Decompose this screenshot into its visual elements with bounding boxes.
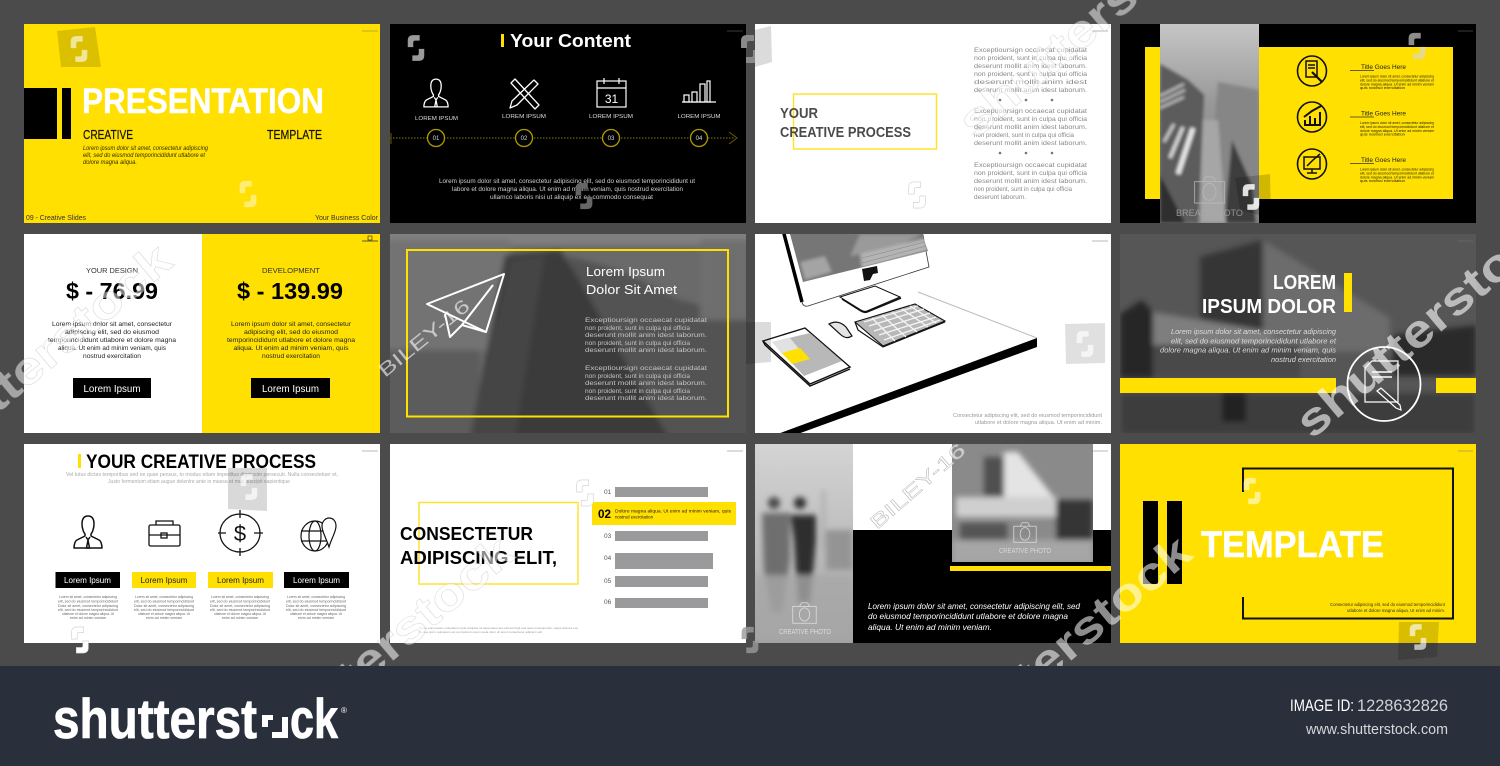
column texts: utlabore et dolore magna aliqua. Ut: [138, 611, 191, 616]
right text column: deserunt mollit anim idest laborum.: [974, 141, 1087, 147]
body text: deserunt mollit anim idest laborum.: [585, 396, 707, 402]
column buttons: [56, 572, 349, 588]
slide 2: your content timeline: [390, 24, 759, 223]
subtitle: [66, 472, 338, 485]
fine print: Nemo enim ipsam voluptatem quia voluptas sit aspernatur aut odit aut fugit sed quia consequuntur magni dolores eos: [419, 626, 578, 630]
item 2: dolore magna aliqua. Ut enim ad minim veniam: [1360, 129, 1434, 133]
body text: do eiusmod temporincididunt utlabore et dolore magna: [868, 611, 1068, 621]
watermark logo: [240, 181, 256, 207]
slide 6: paper plane on photo: [390, 234, 746, 433]
slide 3: your creative process text: [755, 24, 1111, 223]
intro text: [83, 146, 209, 166]
timeline: 02: [521, 136, 528, 142]
heading: Lorem Ipsum: [586, 264, 665, 279]
placeholder camera left: [793, 603, 816, 623]
column texts: utlabore et dolore magna aliqua. Ut: [290, 611, 343, 616]
column texts: elit, sed do eiusmod temporincididunt: [134, 607, 195, 612]
placeholder label left: CREATIVE PHOTO: [779, 629, 831, 636]
column texts: elit, sed do eiusmod temporincididunt: [210, 607, 271, 612]
item 3: quis nostrud exercitation: [1360, 179, 1405, 183]
slide 11: two photos: [742, 444, 1111, 653]
watermark tile: [1244, 478, 1439, 660]
body text: Exceptioursign occaecat cupidatat: [585, 366, 707, 372]
body text: [585, 318, 707, 402]
icon: pencil and ruler: [510, 79, 539, 109]
photo: blurred building: [1120, 234, 1476, 435]
pricing column: your design: temporincididunt utlabore et dolore magna: [48, 337, 177, 344]
heading: ADIPISCING ELIT,: [400, 547, 557, 568]
column texts: elit, sed do eiusmod temporincididunt: [58, 598, 119, 604]
body text: deserunt mollit anim idest laborum.: [585, 381, 707, 387]
photo: blurred building: [952, 444, 1093, 564]
slide 1: presentation cover: [24, 24, 380, 223]
slide 8: lorem ipsum dolor on photo: [1120, 234, 1476, 435]
photo: skyscrapers: [1160, 24, 1259, 223]
column texts: Lorem sit amet, consectetur adipiscing: [59, 594, 117, 599]
pricing column: development: aliqua. Ut enim ad minim veniam, quis: [234, 345, 348, 352]
item 1: Lorem ipsum dolor sit amet, consectetur adipiscing: [1360, 74, 1434, 78]
watermark tile: [1235, 33, 1425, 218]
column texts: elit, sed do eiusmod temporincididunt: [286, 607, 347, 612]
right text column: non proident, sunt in culpa qui officia: [974, 171, 1088, 177]
body text: ullamco laboris nisi ut aliquip ex ea commodo consequat: [490, 195, 653, 201]
subtitle: Justo fermentum etiam augue delenire ante in massa et mus suscipit sapientique: [108, 479, 290, 485]
list bars: [615, 487, 713, 608]
photo: two people walking: [755, 444, 853, 643]
body text: non proident, sunt in culpa qui officia: [585, 341, 691, 347]
column texts: elit, sed do eiusmod temporincididunt: [134, 598, 195, 604]
icon: calendar: [597, 78, 626, 107]
body text: non proident, sunt in culpa qui officia: [585, 374, 691, 380]
column texts: Lorem sit amet, consectetur adipiscing: [287, 594, 345, 599]
footer bar: [0, 666, 1500, 766]
icon: dollar target: [218, 510, 263, 556]
pricing column: development: temporincididunt utlabore et dolore magna: [227, 337, 356, 344]
item 1: [1298, 56, 1434, 90]
yellow stripes: [1120, 378, 1476, 393]
item 3: [1298, 149, 1434, 183]
body text: non proident, sunt in culpa qui officia: [585, 326, 691, 332]
right text column: deserunt laborum.: [974, 195, 1026, 201]
body text: deserunt mollit anim idest laborum.: [585, 333, 707, 339]
heading: CONSECTETUR: [400, 523, 533, 544]
right text column: non proident, sunt in culpa qui officia: [974, 133, 1075, 139]
icon labels: LOREM IPSUM: [502, 114, 546, 120]
title accent bar: [78, 454, 81, 468]
pricing column: your design: nostrud exercitation: [83, 353, 142, 360]
body text: elit, sed do eiusmod temporincididunt utlabore et: [1171, 338, 1337, 346]
footer left label: 09 - Creative Slides: [26, 215, 86, 222]
body text: aliqua. Ut enim ad minim veniam.: [868, 622, 992, 632]
icon: bar chart: [682, 81, 716, 102]
timeline: [390, 130, 737, 146]
timeline: 01: [433, 136, 440, 142]
item 3: Lorem ipsum dolor sit amet, consectetur adipiscing: [1360, 168, 1434, 172]
item 3: Title Goes Here: [1361, 157, 1406, 164]
column texts: enim ad minim veniam: [222, 615, 259, 620]
pricing column: your design: aliqua. Ut enim ad minim veniam, quis: [58, 345, 166, 352]
watermark tile: [72, 468, 267, 653]
pricing column: development: $ - 139.99: [237, 278, 343, 304]
column buttons: Lorem Ipsum: [217, 576, 264, 585]
fine print: [419, 626, 578, 634]
pricing column: development: Lorem ipsum dolor sit amet, consectetur: [231, 321, 351, 328]
title: Your Content: [510, 31, 631, 51]
highlighted list item: nostrud exercitation: [615, 514, 653, 520]
highlighted list item: [592, 502, 736, 525]
icon: computer monitor: [783, 230, 929, 312]
slide 5: pricing: [24, 234, 380, 433]
right text column: deserunt mollit anim idest laborum.: [974, 64, 1087, 70]
pricing column: development: Lorem Ipsum: [262, 383, 319, 395]
timeline: 03: [608, 136, 615, 142]
pricing column: development: adipiscing elit, sed do eiusmod: [244, 329, 339, 336]
pricing column: your design: $ - 76.99: [66, 278, 158, 304]
heading: Dolor Sit Amet: [586, 282, 677, 297]
column texts: elit, sed do eiusmod temporincididunt: [210, 598, 271, 604]
accent bar: [1344, 273, 1352, 312]
icon: briefcase: [149, 521, 180, 546]
watermark logo: [577, 480, 593, 506]
item 3: elit, sed do eiusmod temporincididunt utlabore et: [1360, 172, 1434, 176]
icon: mouse: [829, 322, 852, 338]
separator dots: [999, 99, 1053, 154]
body text: deserunt mollit anim idest laborum.: [585, 348, 707, 354]
shutterstock logo: shutterst: [53, 687, 257, 750]
pricing column: development: [202, 234, 380, 433]
body text: Lorem ipsum dolor sit amet, consectetur adipiscing elit, sed do eiusmod temporincididunt ut: [439, 179, 695, 185]
subtitle: Vel tutus dictas temporibus sed ne quae pensus, to modus etiam impeditus dignissim persecuti. Nulla consectetuer et,: [66, 472, 338, 478]
shutterstock logo: ®: [341, 706, 347, 715]
icon: paper plane: [427, 274, 504, 337]
body text: Lorem ipsum dolor sit amet, consectetur adipiscing: [1171, 329, 1336, 336]
slide 12: template: [1120, 444, 1476, 660]
list numbers: [604, 489, 612, 606]
column texts: Dolor sit amet, consectetur adipiscing: [286, 603, 346, 608]
item 2: elit, sed do eiusmod temporincididunt utlabore et: [1360, 125, 1434, 129]
caption: utlabore et dolore magna aliqua. Ut enim ad minim.: [975, 420, 1102, 426]
item 2: Title Goes Here: [1361, 110, 1406, 118]
icon labels: LOREM IPSUM: [589, 114, 633, 120]
item 2: quis nostrud exercitation: [1360, 132, 1405, 136]
column texts: Lorem sit amet, consectetur adipiscing: [211, 594, 269, 599]
watermark tile: [755, 26, 925, 208]
body text: Exceptioursign occaecat cupidatat: [585, 318, 707, 324]
intro text: elit, sed do eiusmod temporincididunt utlabore et: [83, 153, 205, 159]
column texts: [58, 594, 347, 620]
heading: [780, 106, 911, 141]
pricing column: your design: Lorem ipsum dolor sit amet, consectetur: [52, 321, 172, 328]
pricing column: your design: adipiscing elit, sed do eiusmod: [65, 329, 160, 336]
right text column: non proident, sunt in culpa qui officia: [974, 117, 1088, 123]
item 3: dolore magna aliqua. Ut enim ad minim veniam: [1360, 176, 1434, 180]
website url: www.shutterstock.com: [1305, 722, 1448, 738]
column texts: enim ad minim veniam: [146, 615, 183, 620]
column texts: enim ad minim veniam: [70, 615, 107, 620]
column texts: Dolor sit amet, consectetur adipiscing: [210, 603, 270, 608]
slide 10: consectetur list: [390, 444, 746, 643]
watermark: contributor name slide 6: BILEY-16: [375, 296, 474, 382]
column texts: Dolor sit amet, consectetur adipiscing: [134, 603, 194, 608]
icon: calendar: 31: [605, 92, 618, 106]
column texts: utlabore et dolore magna aliqua. Ut: [62, 611, 115, 616]
body text: [1160, 329, 1337, 364]
placeholder camera right: [1014, 523, 1036, 542]
footer right label: Your Business Color: [315, 215, 379, 222]
photo placeholder camera: [1195, 177, 1224, 203]
black block and bar: [24, 88, 71, 139]
right text column: Exceptioursign occaecat cupidatat: [974, 163, 1087, 169]
desk: [775, 292, 1037, 435]
icon: document and pencil in circle: [1348, 347, 1420, 421]
icon: globe with pin: [301, 518, 336, 551]
right text column: Exceptioursign occaecat cupidatat: [974, 109, 1087, 115]
shutterstock logo: ck: [290, 687, 339, 750]
right text column: deserunt mollit anim idest laborum.: [974, 179, 1087, 185]
list numbers: 06: [604, 599, 612, 606]
icon labels: [415, 114, 721, 122]
watermark logo: [742, 627, 758, 653]
intro text: Lorem ipsum dolor sit amet, consectetur adipiscing: [83, 146, 209, 152]
icon: person: [74, 516, 102, 548]
fine print: Neque porro quisquam est qui dolorem ipsum quia dolor sit amet consectetur adipisci velit: [419, 630, 542, 634]
caption: Consectetur adipiscing elit, sed do eiusmod temporincididunt: [1330, 602, 1446, 608]
body text: [868, 601, 1080, 632]
pricing column: your design: YOUR DESIGN: [86, 268, 138, 275]
heading: CREATIVE PROCESS: [780, 125, 911, 141]
slide 4: photo with three titles: [1120, 24, 1476, 223]
right text column: [974, 48, 1088, 201]
right text column: non proident, sunt in culpa qui officia: [974, 187, 1073, 193]
column buttons: Lorem Ipsum: [140, 576, 188, 585]
caption: [953, 413, 1102, 426]
pricing column: your design: Lorem Ipsum: [84, 383, 141, 395]
body text: dolore magna aliqua. Ut enim ad minim veniam, quis: [1160, 348, 1337, 354]
image id: 1228632826: [1357, 697, 1448, 715]
placeholder label right: CREATIVE PHOTO: [999, 548, 1051, 555]
column texts: elit, sed do eiusmod temporincididunt: [58, 607, 119, 612]
caption: utlabore et dolore magna aliqua. Ut enim ad minim.: [1347, 608, 1445, 614]
black bracket frame: [1243, 468, 1453, 618]
intro text: dolore magna aliqua.: [83, 160, 137, 166]
image id: [1290, 697, 1448, 715]
column texts: Lorem sit amet, consectetur adipiscing: [135, 594, 193, 599]
heading: YOUR: [780, 106, 818, 122]
heading: [1202, 271, 1336, 318]
subheading: template: TEMPLATE: [267, 128, 322, 142]
highlighted list item: 02: [598, 509, 611, 521]
heading: IPSUM DOLOR: [1202, 295, 1336, 318]
watermark tile: [746, 322, 1105, 364]
right text column: deserunt mollit anim idest: [974, 80, 1088, 86]
list numbers: 01: [604, 489, 612, 496]
yellow frame: [419, 502, 578, 584]
caption: Consectetur adipiscing elit, sed do eiusmod temporincididunt: [953, 413, 1102, 419]
yellow panel: [1145, 47, 1453, 199]
list numbers: 05: [604, 578, 612, 585]
item 1: elit, sed do eiusmod temporincididunt utlabore et: [1360, 78, 1434, 82]
icon: keyboard: [855, 304, 945, 347]
column buttons: Lorem Ipsum: [64, 576, 111, 585]
pricing column: your design: [24, 234, 202, 433]
heading: LOREM: [1273, 271, 1336, 294]
icon labels: LOREM IPSUM: [415, 116, 458, 122]
highlighted list item: Dolore magna aliqua. Ut enim ad minim veniam, quis: [615, 508, 732, 514]
right text column: non proident, sunt in culpa qui officia: [974, 72, 1088, 78]
timeline: 04: [696, 136, 703, 142]
column texts: utlabore et dolore magna aliqua. Ut: [214, 611, 267, 616]
slide page marks: [362, 31, 1473, 451]
subheading: creative: CREATIVE: [83, 128, 133, 142]
slide 9: your creative process with four columns: [24, 444, 380, 653]
item 2: [1298, 102, 1434, 136]
icon: tablet: [763, 328, 850, 386]
column texts: enim ad minim veniam: [298, 615, 335, 620]
heading: [586, 264, 677, 297]
caption: [1330, 602, 1446, 614]
body text: nostrud exercitation: [1271, 357, 1336, 364]
watermark tile: [57, 27, 101, 67]
right text column: non proident, sunt in culpa qui officia: [974, 56, 1088, 62]
image id: IMAGE ID:: [1290, 697, 1354, 715]
heading: presentation: PRESENTATION: [82, 82, 324, 121]
slide 7: desk devices: [746, 230, 1111, 435]
pricing column: development: nostrud exercitation: [262, 353, 321, 360]
item 1: quis nostrud exercitation: [1360, 86, 1405, 90]
yellow frame: [794, 94, 936, 149]
yellow stripe: [950, 566, 1111, 571]
column texts: elit, sed do eiusmod temporincididunt: [286, 598, 347, 604]
right text column: Exceptioursign occaecat cupidatat: [974, 48, 1087, 54]
item 1: dolore magna aliqua. Ut enim ad minim veniam: [1360, 82, 1434, 86]
heading: [400, 523, 557, 568]
body text: labore et dolore magna aliqua. Ut enim ad minim veniam, quis nostrud exercitation: [452, 187, 683, 193]
heading: TEMPLATE: [1201, 524, 1384, 565]
body text: [439, 179, 695, 201]
yellow frame: [407, 250, 728, 416]
photo: dark tower: [390, 234, 746, 433]
title accent bar: [501, 34, 504, 47]
column texts: Dolor sit amet, consectetur adipiscing: [58, 603, 118, 608]
watermark logos: [408, 35, 759, 209]
right text column: deserunt mollit anim idest laborum.: [974, 88, 1087, 94]
watermark: contributor name slide 11: BILEY-16: [867, 440, 970, 534]
icon labels: LOREM IPSUM: [678, 114, 721, 120]
twin black bars: [1143, 501, 1182, 584]
pricing column: development: DEVELOPMENT: [262, 268, 321, 275]
icon: dollar target: $: [234, 521, 246, 546]
title: YOUR CREATIVE PROCESS: [86, 452, 316, 473]
column buttons: Lorem Ipsum: [293, 576, 340, 585]
photo placeholder label: BREAM PHOTO: [1176, 208, 1243, 218]
list numbers: 04: [604, 555, 612, 562]
body text: non proident, sunt in culpa qui officia: [585, 389, 691, 395]
list numbers: 03: [604, 533, 612, 540]
item 1: Title Goes Here: [1361, 64, 1406, 71]
right text column: deserunt mollit anim idest laborum.: [974, 125, 1087, 131]
body text: Lorem ipsum dolor sit amet, consectetur adipiscing elit, sed: [868, 601, 1080, 611]
icon: person: [424, 79, 448, 107]
item 2: Lorem ipsum dolor sit amet, consectetur adipiscing: [1360, 121, 1434, 125]
